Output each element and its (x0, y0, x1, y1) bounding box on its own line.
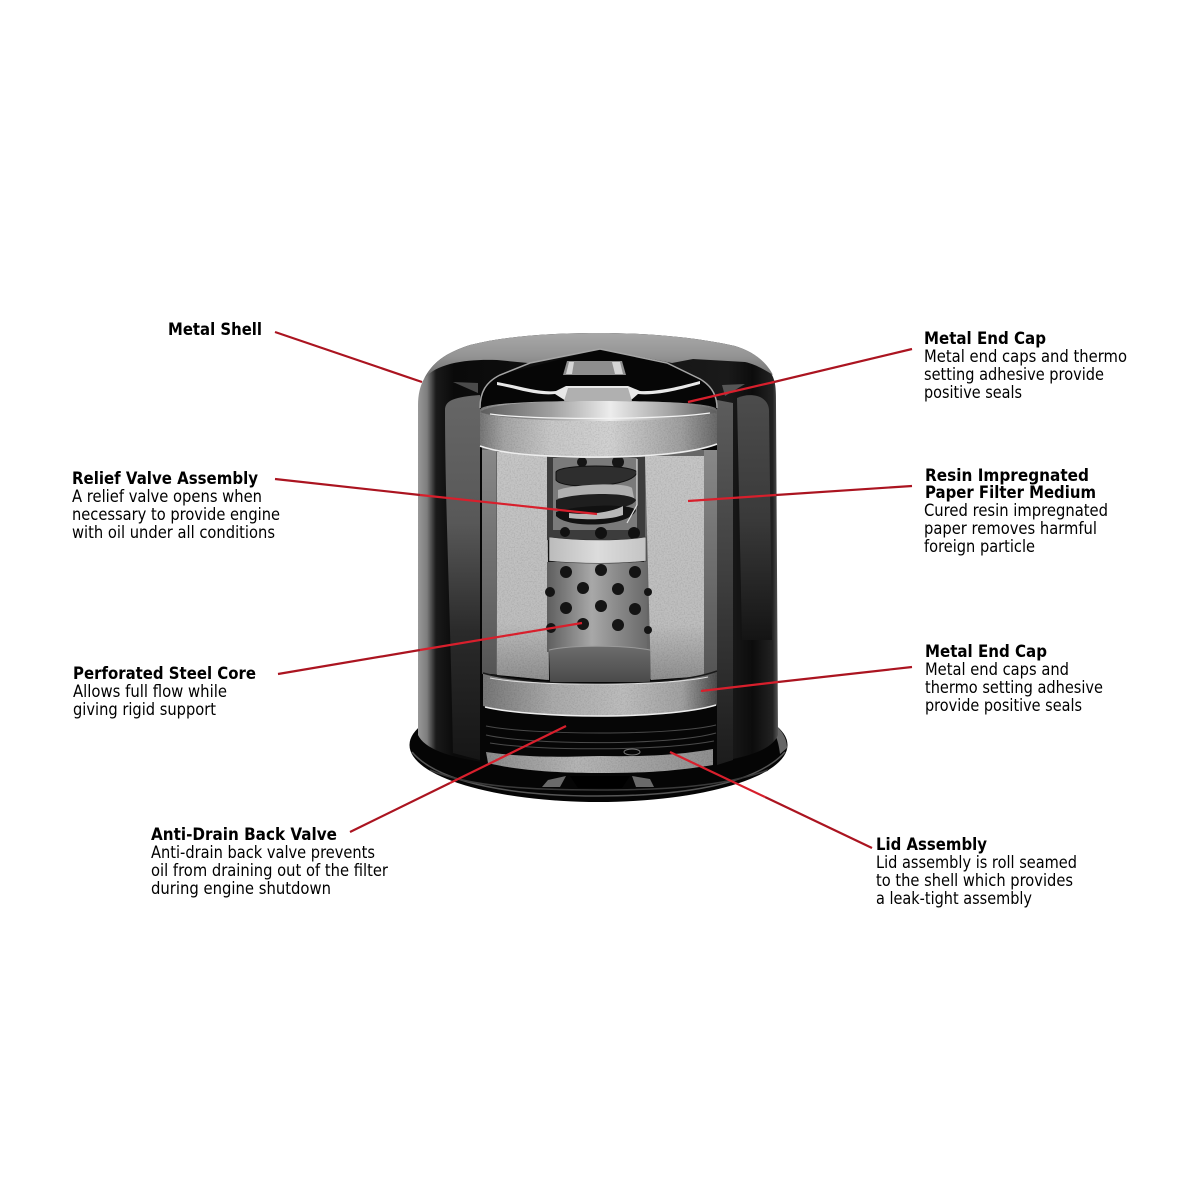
perforated steel core (545, 562, 652, 682)
description (72, 487, 280, 542)
description (924, 501, 1108, 556)
description (925, 660, 1103, 715)
top metal end cap (480, 401, 717, 458)
description: oil from draining out of the filter (151, 861, 388, 880)
heading: Metal Shell (168, 320, 262, 339)
callout: Relief Valve Assembly (72, 469, 597, 542)
leader line (688, 486, 912, 501)
description: A relief valve opens when (72, 487, 262, 506)
description (151, 843, 388, 898)
callout: Metal End Cap (bottom) (701, 642, 1103, 715)
description: a leak-tight assembly (876, 889, 1032, 908)
base flange (410, 688, 788, 802)
callout: Lid Assembly (670, 752, 1077, 908)
description: Anti-drain back valve prevents (151, 843, 375, 862)
description: Metal end caps and thermo (924, 347, 1127, 366)
callout: Resin Impregnated Paper Filter Medium (688, 466, 1108, 556)
opening edge highlight (480, 349, 717, 408)
top centre stud (497, 361, 700, 401)
shell right inner bands (717, 400, 733, 765)
description: during engine shutdown (151, 879, 331, 898)
callout: Perforated Steel Core (73, 623, 582, 719)
description: to the shell which provides (876, 871, 1073, 890)
heading: Anti-Drain Back Valve (151, 825, 337, 844)
heading: Resin Impregnated (925, 466, 1089, 485)
leader line (278, 623, 582, 674)
heading: Metal End Cap (925, 642, 1047, 661)
description: paper removes harmful (924, 519, 1097, 538)
description: setting adhesive provide (924, 365, 1104, 384)
callout: Metal Shell (168, 320, 422, 382)
description: provide positive seals (925, 696, 1082, 715)
shell dome highlight (424, 333, 773, 379)
heading: Perforated Steel Core (73, 664, 256, 683)
callout: Metal End Cap (top) (688, 329, 1127, 402)
paper filter medium right (643, 450, 717, 680)
description: positive seals (924, 383, 1022, 402)
description: Allows full flow while (73, 682, 227, 701)
description: thermo setting adhesive (925, 678, 1103, 697)
bottom metal end cap (483, 671, 717, 716)
cutaway opening (480, 349, 717, 762)
description: foreign particle (924, 537, 1035, 556)
callout: Anti-Drain Back Valve (151, 726, 566, 898)
description: giving rigid support (73, 700, 216, 719)
leader line (275, 332, 422, 382)
leader line (275, 479, 597, 514)
inner white band (549, 537, 646, 563)
paper filter medium left (482, 445, 549, 680)
description: necessary to provide engine (72, 505, 280, 524)
oil filter cutaway illustration (410, 333, 788, 802)
leader line (688, 349, 912, 402)
description (73, 682, 227, 719)
description: Lid assembly is roll seamed (876, 853, 1077, 872)
heading: Metal End Cap (924, 329, 1046, 348)
description (876, 853, 1077, 908)
description: with oil under all conditions (72, 523, 275, 542)
leader line (670, 752, 872, 848)
heading: Paper Filter Medium (925, 483, 1096, 502)
description (924, 347, 1127, 402)
description: Metal end caps and (925, 660, 1069, 679)
description: Cured resin impregnated (924, 501, 1108, 520)
metal shell body (418, 333, 778, 768)
heading: Relief Valve Assembly (72, 469, 258, 488)
heading: Lid Assembly (876, 835, 987, 854)
leader line (701, 667, 912, 691)
heading (925, 466, 1096, 502)
leader line (350, 726, 566, 832)
shell left inner band (445, 395, 480, 760)
anti-drain back valve (486, 725, 716, 749)
relief valve assembly (547, 455, 645, 540)
lid assembly (486, 749, 713, 773)
